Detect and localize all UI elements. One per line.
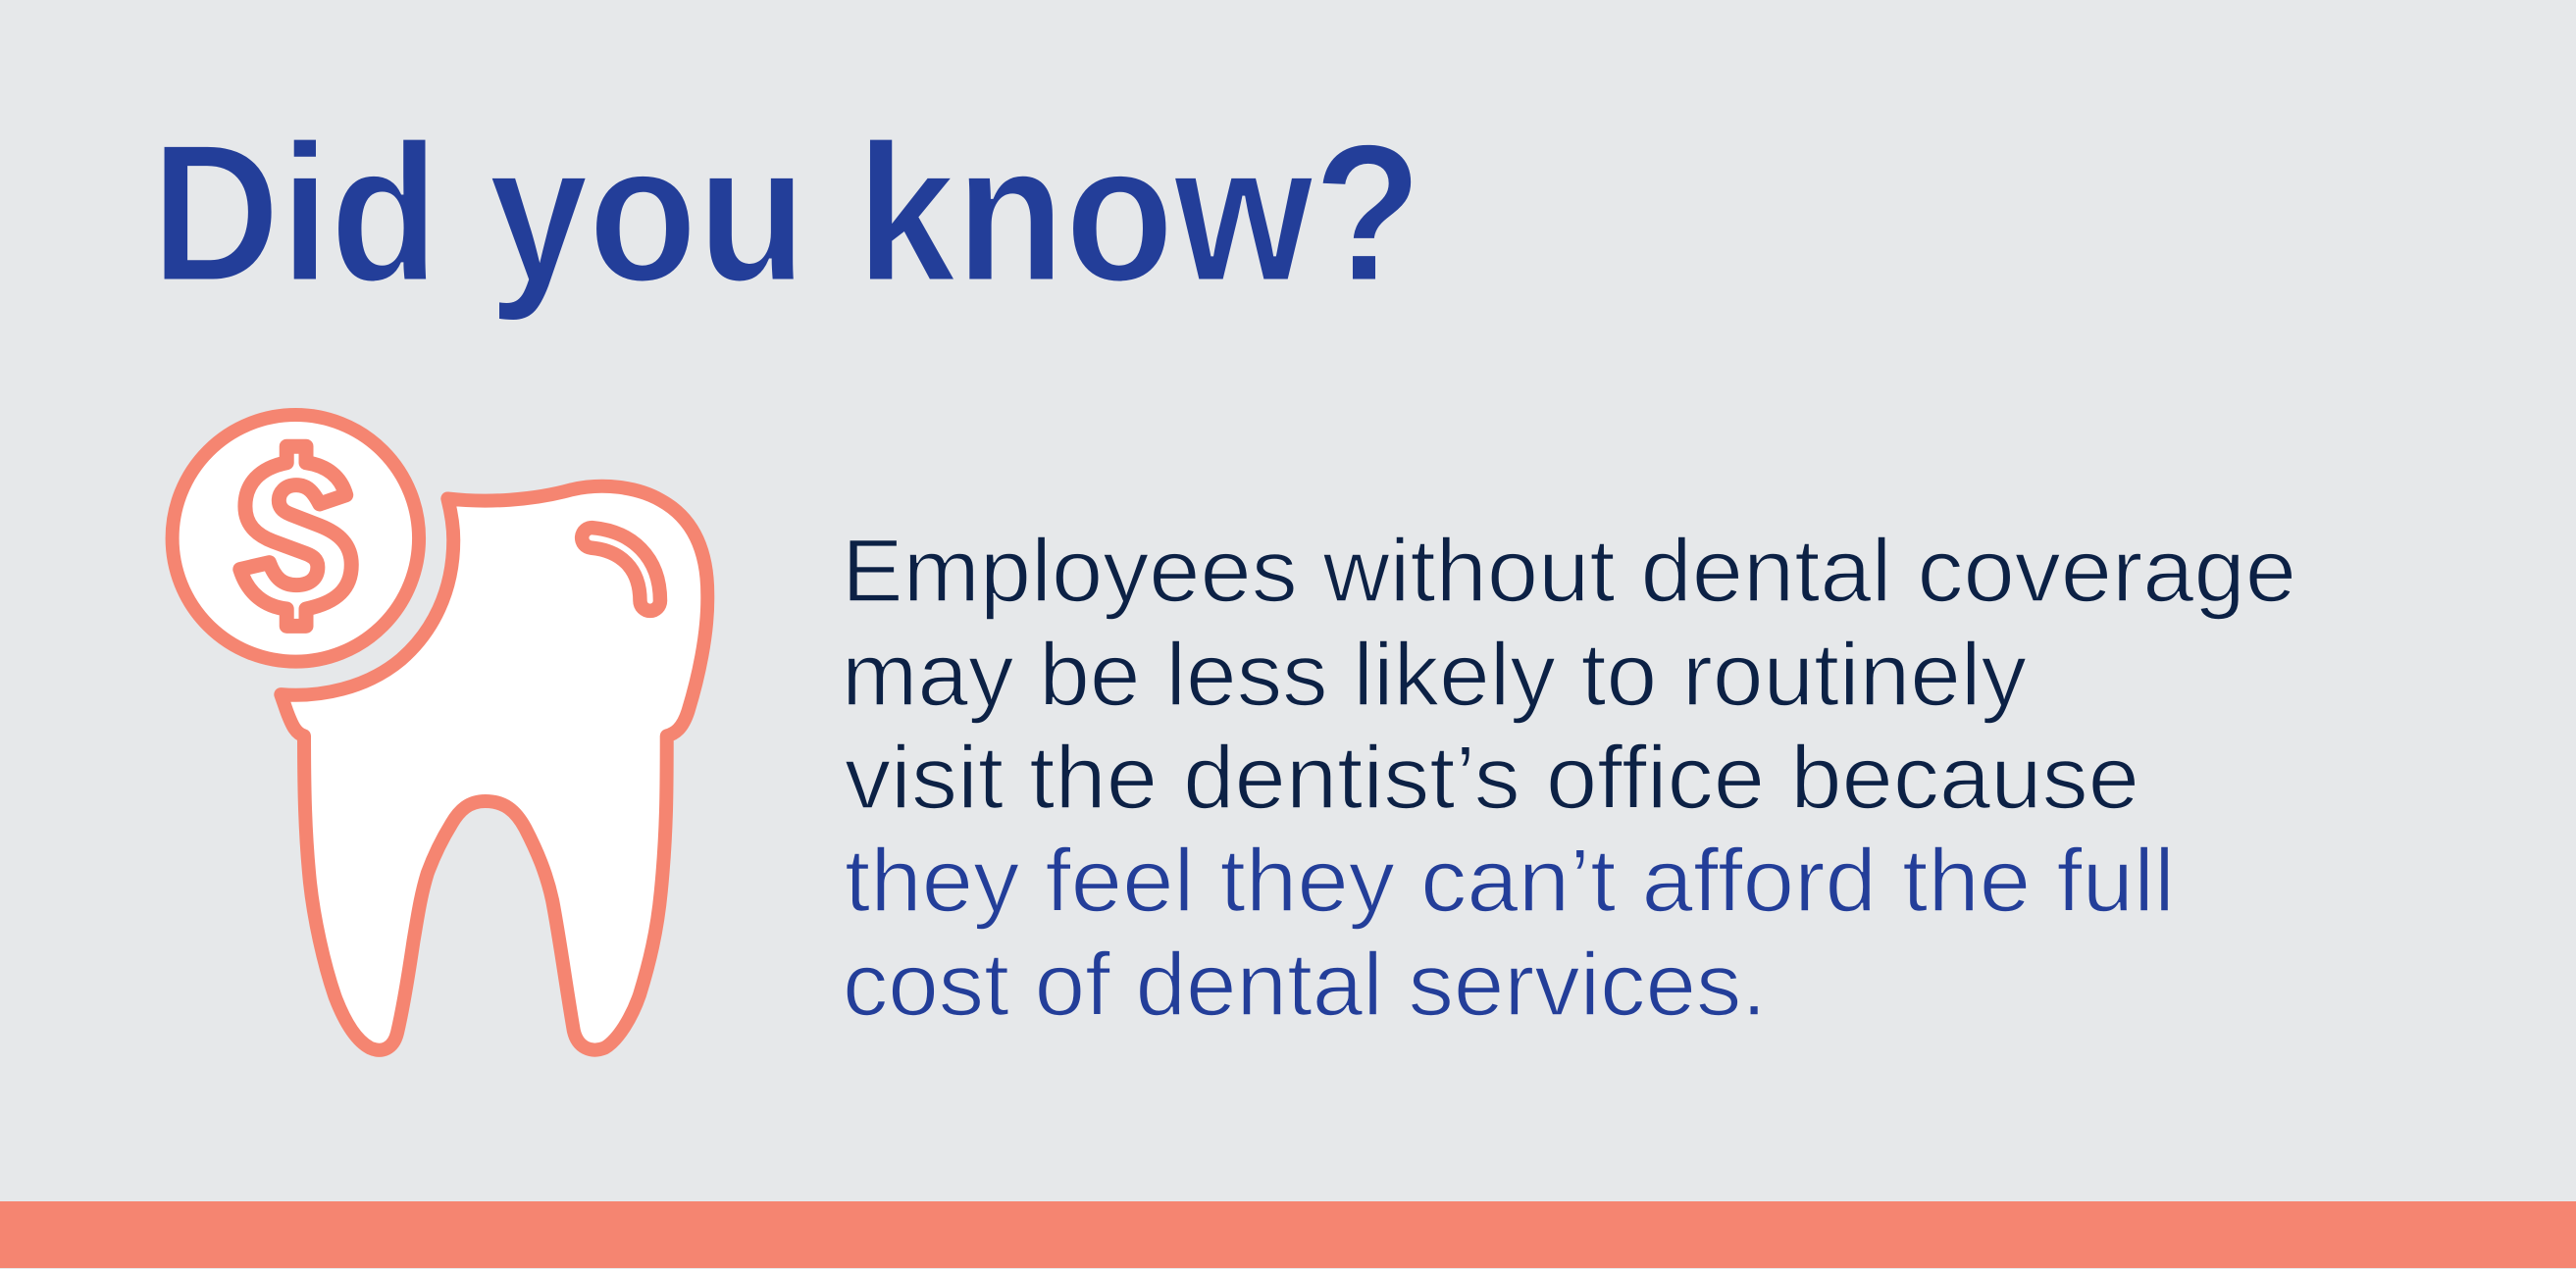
icon: tooth outline — [281, 486, 707, 1050]
highlighted line 4: they feel they can’t afford the full — [845, 832, 2175, 931]
title: Did you know? — [151, 104, 1422, 323]
body line 2: may be less likely to routinely — [842, 626, 2027, 725]
icon: tooth with dollar coin — [173, 415, 707, 1050]
body line 3: visit the dentist’s office because — [845, 729, 2139, 828]
body line 1: Employees without dental coverage — [842, 522, 2296, 621]
icon: dollar sign — [240, 446, 351, 626]
footer bar — [0, 1201, 2576, 1268]
icon: coin circle — [173, 415, 419, 662]
body text — [842, 522, 2296, 1035]
icon: tooth highlight — [592, 537, 650, 601]
highlighted line 5: cost of dental services. — [843, 936, 1767, 1035]
